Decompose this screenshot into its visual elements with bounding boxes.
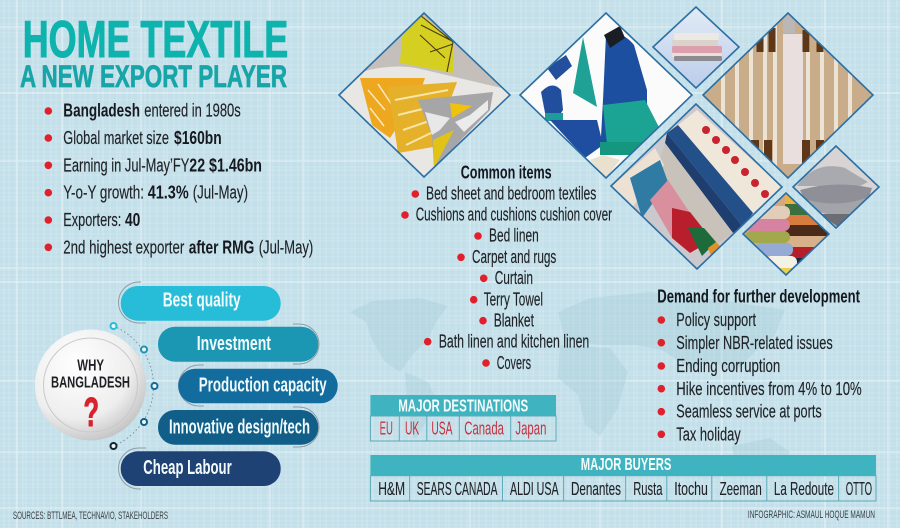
demand for further development list: Ending corruption bbox=[676, 356, 780, 376]
key facts list: 41.3% bbox=[148, 183, 189, 203]
key facts list: after RMG bbox=[189, 237, 254, 257]
table: major buyers: Zeeman bbox=[720, 479, 762, 499]
table: major buyers: SEARS CANADA bbox=[417, 479, 498, 499]
key facts list: 40 bbox=[125, 210, 140, 230]
table: major buyers: H&M bbox=[378, 479, 405, 499]
heading: common items: Common items bbox=[461, 162, 552, 182]
key facts list: Earning in Jul-May’FY bbox=[63, 155, 189, 175]
table: major buyers bbox=[370, 454, 876, 501]
pill: production capacity bbox=[178, 369, 338, 403]
common items list: Bath linen and kitchen linen bbox=[439, 332, 589, 352]
title bbox=[20, 11, 288, 94]
key facts list: (Jul-May) bbox=[259, 237, 313, 257]
key facts list bbox=[44, 101, 313, 257]
demand for further development list: Tax holiday bbox=[676, 424, 741, 444]
common items list: Carpet and rugs bbox=[472, 247, 556, 267]
photo: colourful towels bbox=[743, 193, 829, 276]
table: major buyers: MAJOR BUYERS bbox=[581, 454, 671, 474]
table: major destinations: USA bbox=[431, 418, 452, 438]
key facts list: 2nd highest exporter bbox=[63, 237, 184, 257]
pill: innovative design/tech bbox=[158, 410, 318, 445]
key facts list: Y-o-Y growth: bbox=[63, 183, 144, 203]
photo: grey pillows bbox=[793, 146, 879, 228]
table: major destinations: Canada bbox=[464, 418, 505, 438]
common items list: Curtain bbox=[495, 268, 533, 288]
heading: home textile: HOME TEXTILE bbox=[23, 11, 288, 69]
sources: SOURCES: BTTLMEA, TECHNAVIO, STAKEHOLDERS bbox=[13, 510, 168, 522]
common items list: Bed sheet and bedroom textiles bbox=[426, 184, 596, 204]
pill: production capacity: Production capacity bbox=[199, 375, 327, 397]
pill: investment bbox=[158, 327, 318, 362]
demand for further development list: Simpler NBR-related issues bbox=[676, 333, 833, 353]
pill: cheap labour bbox=[121, 451, 281, 486]
table: major destinations: EU bbox=[380, 418, 393, 438]
dotted connector arc bbox=[114, 326, 154, 446]
common items list bbox=[401, 162, 612, 373]
demand for further development list bbox=[657, 287, 862, 444]
demand for further development list: Policy support bbox=[676, 310, 756, 330]
central disc bbox=[35, 330, 146, 440]
pill: best quality bbox=[121, 286, 281, 321]
photo: curtains bbox=[703, 0, 873, 178]
photo: blue and teal apron set bbox=[520, 13, 692, 178]
pill: investment: Investment bbox=[197, 333, 271, 355]
key facts list: $160bn bbox=[174, 128, 222, 148]
common items list: Bed linen bbox=[489, 226, 539, 246]
table: major buyers: Itochu bbox=[674, 479, 708, 499]
common items list: Cushions and cushions cushion cover bbox=[416, 205, 612, 225]
table: major buyers: Denantes bbox=[571, 479, 621, 499]
key facts list: entered in 1980s bbox=[144, 101, 241, 121]
table: major buyers: OTTO bbox=[846, 479, 872, 499]
why bangladesh diagram bbox=[35, 282, 338, 489]
common items list: Covers bbox=[497, 353, 531, 373]
central disc: ? bbox=[84, 389, 99, 435]
table: major destinations: MAJOR DESTINATIONS bbox=[398, 396, 528, 416]
photo: patterned cushions bbox=[339, 13, 510, 177]
common items list: Blanket bbox=[494, 311, 534, 331]
central disc: WHY bbox=[77, 358, 104, 375]
demand for further development list: Seamless service at ports bbox=[676, 402, 822, 422]
photo: carpets and rugs bbox=[611, 104, 782, 269]
central disc: BANGLADESH bbox=[51, 375, 130, 392]
key facts list: 22 $1.46bn bbox=[189, 155, 262, 175]
table: major destinations: Japan bbox=[515, 418, 546, 438]
pill: cheap labour: Cheap Labour bbox=[143, 457, 232, 479]
common items list: Terry Towel bbox=[484, 289, 543, 309]
table: major buyers: ALDI USA bbox=[510, 479, 559, 499]
key facts list: Global market size bbox=[63, 128, 169, 148]
pill: innovative design/tech: Innovative design/tech bbox=[169, 416, 310, 438]
world map watermark bbox=[350, 292, 790, 472]
table: major buyers: Rusta bbox=[633, 479, 663, 499]
photo: stacked bed sheets bbox=[653, 7, 739, 88]
key facts list: (Jul-May) bbox=[193, 183, 248, 203]
table: major buyers: La Redoute bbox=[774, 479, 834, 499]
table: major destinations bbox=[370, 395, 556, 441]
subheading: a new export player: A NEW EXPORT PLAYER bbox=[20, 58, 287, 94]
pill outlines bbox=[118, 282, 319, 489]
pill: best quality: Best quality bbox=[163, 290, 241, 312]
table: major destinations: UK bbox=[405, 418, 419, 438]
key facts list: Bangladesh bbox=[63, 101, 140, 121]
key facts list: Exporters: bbox=[63, 210, 121, 230]
connector dots bbox=[110, 323, 158, 449]
